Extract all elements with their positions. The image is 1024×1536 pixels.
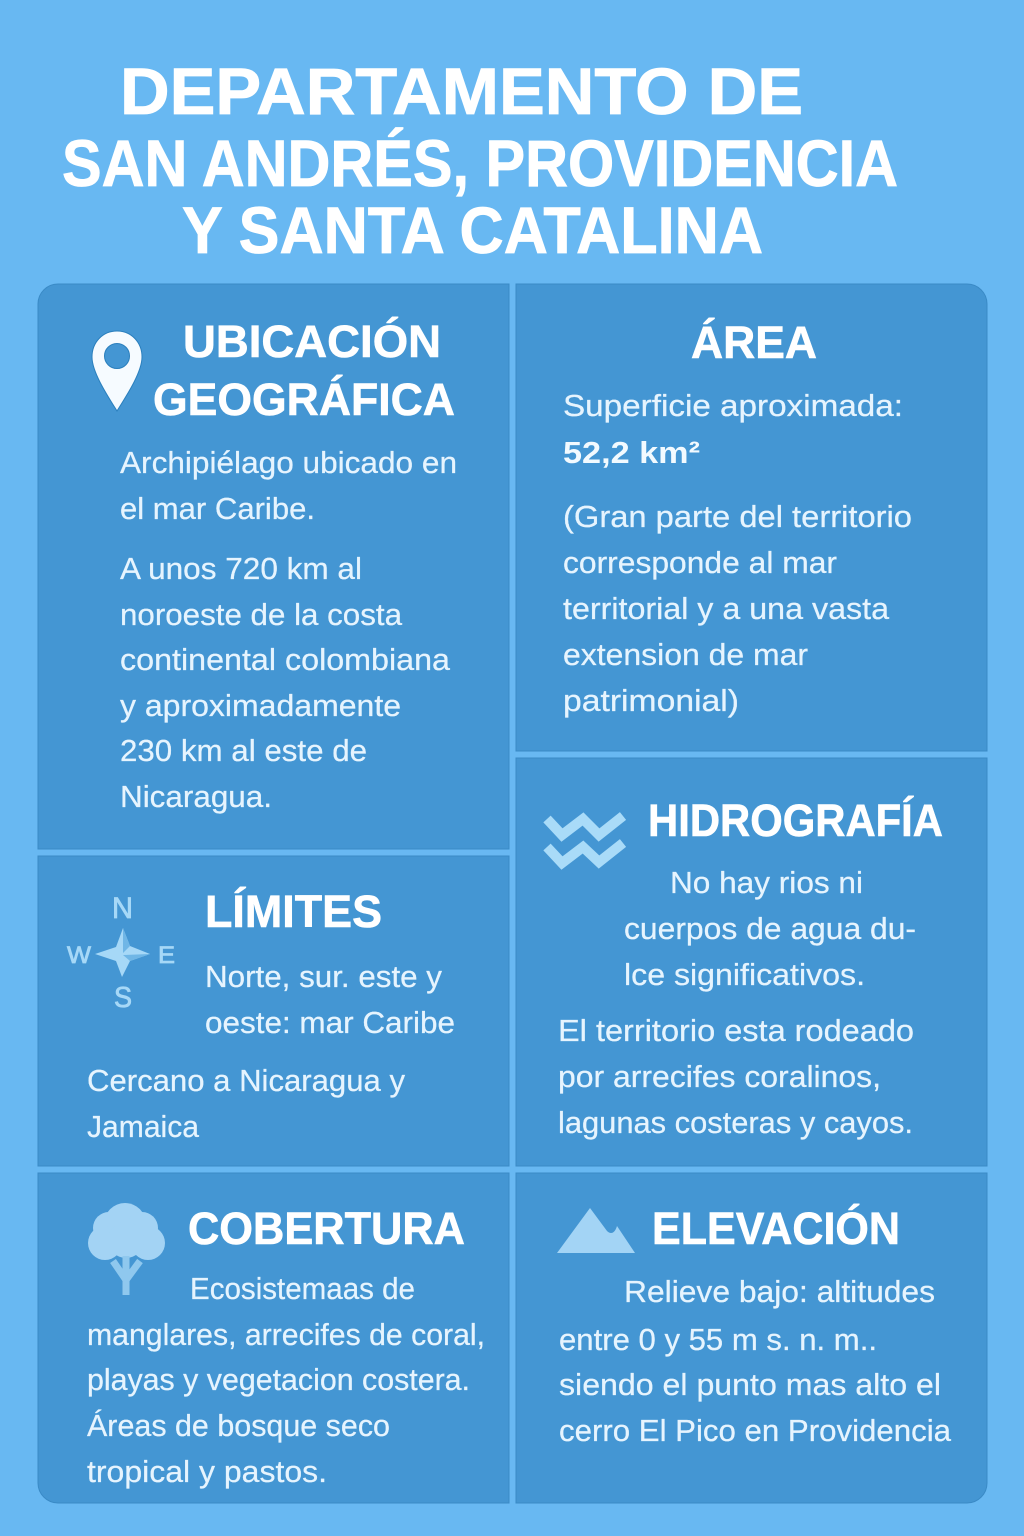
text: hidrografía: El territorio esta rodeado [558,1013,914,1048]
text: área: extension de mar [563,637,808,672]
text: cobertura: playas y vegetacion costera. [87,1362,470,1397]
text: límites: Norte, sur. este y [205,959,442,994]
text: área [563,388,912,718]
text: hidrografía: por arrecifes coralinos, [558,1059,881,1094]
text: área: patrimonial) [563,683,739,718]
heading: área: ÁREA [691,317,817,368]
panel: límites [38,856,509,1166]
text: límites: Jamaica [87,1109,200,1144]
text: ubicación: el mar Caribe. [120,491,315,526]
text: hidrografía: lagunas costeras y cayos. [558,1105,913,1140]
text: área: territorial y a una vasta [563,591,890,626]
icon: tree [88,1203,165,1295]
icon: mountain [557,1208,635,1253]
icon: compass [67,892,175,1014]
text: cobertura: Áreas de bosque seco [87,1408,390,1443]
icon: compass: S [114,982,132,1014]
title [62,54,898,267]
text: elevación: siendo el punto mas alto el [559,1367,941,1402]
heading: ubicación geográfica: GEOGRÁFICA [153,374,455,425]
heading: elevación: ELEVACIÓN [652,1203,900,1254]
heading: límites: LÍMITES [205,886,382,937]
heading: ubicación geográfica [153,316,455,425]
title: DEPARTAMENTO DE [120,54,803,128]
text: ubicación: y aproximadamente [120,688,401,723]
panel: hidrografía [516,758,987,1166]
text: área: Superficie aproximada: [563,388,903,423]
heading: hidrografía: HIDROGRAFÍA [648,795,943,846]
text: límites [87,959,455,1144]
text: elevación [559,1274,952,1448]
text: ubicación: continental colombiana [120,642,451,677]
text: elevación: entre 0 y 55 m s. n. m.. [559,1322,877,1357]
heading: cobertura: COBERTURA [188,1203,465,1254]
text: hidrografía [558,865,916,1140]
text: ubicación: A unos 720 km al [120,551,362,586]
panel: elevación [516,1173,987,1503]
panel: área [516,284,987,751]
icon: water waves [547,816,623,863]
text: ubicación [120,445,457,814]
text: límites: Cercano a Nicaragua y [87,1063,405,1098]
icon: compass: N [112,892,133,925]
icon: compass: E [158,942,175,969]
text: ubicación: noroeste de la costa [120,597,403,632]
text: elevación: cerro El Pico en Providencia [559,1413,952,1448]
panel: cobertura [38,1173,509,1503]
icon: map pin [92,331,142,411]
title: Y SANTA CATALINA [182,193,763,267]
text: cobertura: Ecosistemaas de [190,1271,415,1306]
text: cobertura [87,1271,485,1489]
text: área: 52,2 km² [563,435,700,470]
text: hidrografía: lce significativos. [624,957,865,992]
heading: ubicación geográfica: UBICACIÓN [183,316,441,367]
panel: ubicación geográfica [38,284,509,849]
text: ubicación: Nicaragua. [120,779,272,814]
text: ubicación: 230 km al este de [120,733,367,768]
text: cobertura: manglares, arrecifes de coral, [87,1317,485,1352]
title: SAN ANDRÉS, PROVIDENCIA [62,126,898,200]
text: límites: oeste: mar Caribe [205,1005,455,1040]
text: área: corresponde al mar [563,545,837,580]
text: hidrografía: No hay rios ni [670,865,863,900]
icon: compass: W [67,942,91,969]
text: cobertura: tropical y pastos. [87,1454,327,1489]
text: área: (Gran parte del territorio [563,499,912,534]
text: ubicación: Archipiélago ubicado en [120,445,457,480]
text: hidrografía: cuerpos de agua du- [624,911,916,946]
text: elevación: Relieve bajo: altitudes [624,1274,935,1309]
